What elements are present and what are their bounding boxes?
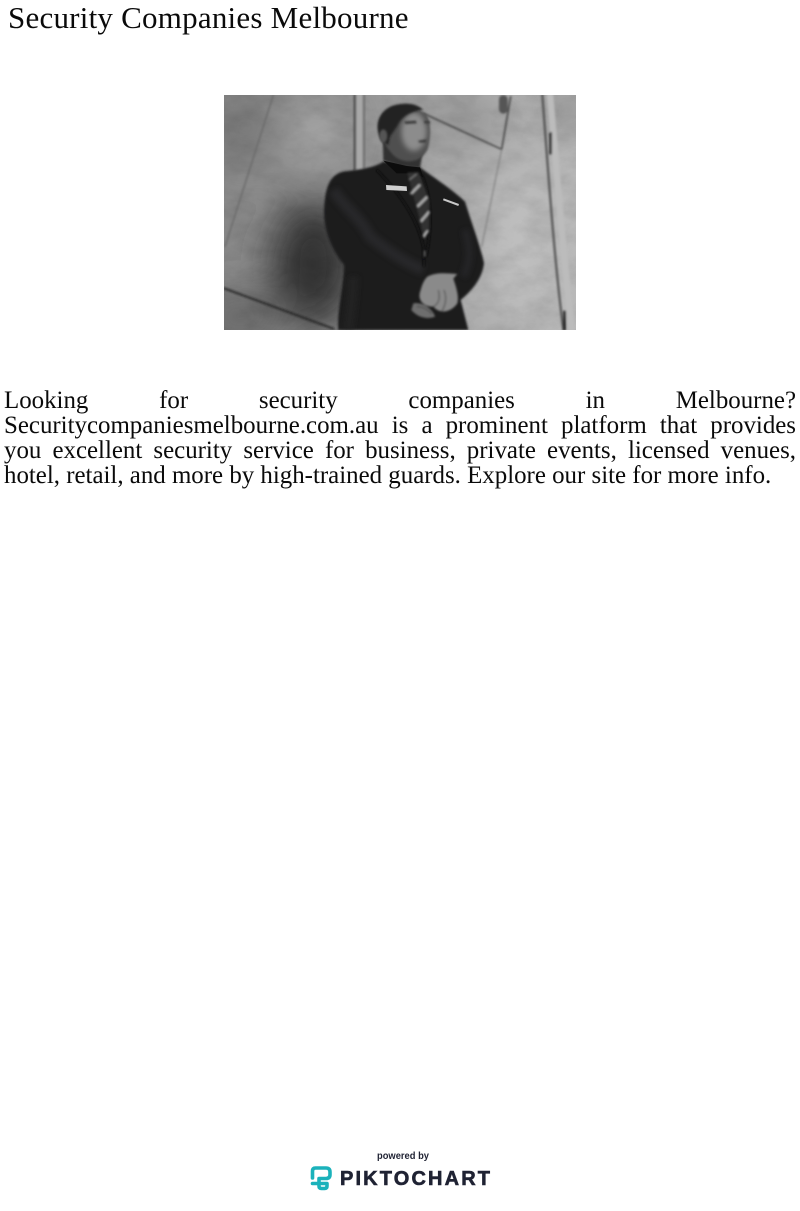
powered by text: powered by xyxy=(377,1151,429,1162)
neck and head xyxy=(378,104,430,168)
title: Security Companies Melbourne xyxy=(8,0,409,35)
wall shading xyxy=(224,95,576,330)
body paragraph: hotel, retail, and more by high-trained guards. Explore our site for more info. xyxy=(4,462,771,489)
clasped hands xyxy=(411,273,458,318)
photo: security guard in dark suit against a concrete wall xyxy=(224,95,576,330)
shirt collar xyxy=(383,161,423,177)
striped tie xyxy=(407,172,429,257)
body paragraph: Looking for security companies in Melbourne? xyxy=(4,387,796,414)
wall background xyxy=(224,95,576,330)
wall panel seams and door frame xyxy=(224,95,572,330)
wall texture xyxy=(224,95,576,330)
wordmark: PIKTOCHART xyxy=(340,1168,490,1190)
piktochart logo xyxy=(310,1151,490,1190)
name badge and pocket logo xyxy=(386,185,459,205)
body paragraph: you excellent security service for business, private events, licensed venues, xyxy=(4,437,796,464)
body paragraph: Securitycompaniesmelbourne.com.au is a prominent platform that provides xyxy=(4,412,796,439)
suit jacket xyxy=(324,162,484,330)
icon: piktochart P mark xyxy=(312,1168,330,1188)
sleeve and lapel folds xyxy=(333,190,469,330)
body paragraph xyxy=(4,387,796,489)
